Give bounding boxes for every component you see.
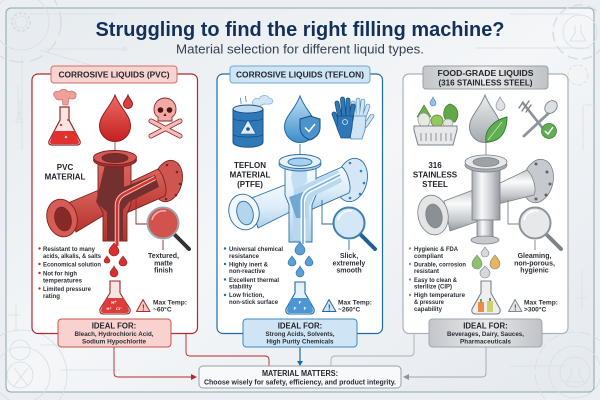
Teflon material label: MATERIAL xyxy=(230,170,270,180)
callout: material matters: Choose wisely for safety, efficiency, and product integrity. xyxy=(204,380,396,386)
Teflon property list: non-stick surface xyxy=(229,299,278,306)
icon: silver drop with leaf xyxy=(470,95,507,142)
Teflon flask xyxy=(286,282,314,314)
PVC property list: rating xyxy=(43,293,60,300)
PVC material label: PVC xyxy=(57,163,73,172)
PVC property list: Resistant to many xyxy=(43,246,95,253)
Teflon flask: F xyxy=(304,306,307,311)
PVC ideal-for box xyxy=(58,319,171,347)
Teflon property list: Highly inert & xyxy=(229,262,268,268)
PVC header tab: CORROSIVE LIQUIDS (PVC) xyxy=(58,71,170,80)
steel property list: & pressure xyxy=(414,299,444,306)
Teflon ideal-for box: IDEAL FOR: xyxy=(278,322,322,330)
icon: smoking flask xyxy=(49,89,80,145)
icon: skull and crossbones xyxy=(151,98,180,136)
Teflon property list: resistance xyxy=(229,253,259,260)
panel: Teflon xyxy=(217,66,382,347)
Teflon property list: Low friction, xyxy=(229,292,264,299)
Teflon temperature warning xyxy=(322,300,372,314)
Teflon cutaway pipe xyxy=(225,144,372,244)
connector: PVC ideal-for to material matters xyxy=(114,347,197,380)
PVC temperature warning: ~60°C xyxy=(153,306,172,314)
Teflon temperature warning: Max Temp: xyxy=(338,300,372,306)
steel property list: compliant xyxy=(414,253,444,260)
PVC property list xyxy=(38,246,101,300)
steel property list: capability xyxy=(414,306,442,313)
PVC acid flask: Cl⁻ xyxy=(116,306,122,311)
PVC material label xyxy=(45,163,85,182)
steel property list: Durable, corrosion xyxy=(414,262,466,268)
Teflon property list: non-reactive xyxy=(229,268,265,275)
steel property list: High temperature xyxy=(414,292,465,299)
steel material label: STEEL xyxy=(422,180,448,189)
Teflon temperature warning: ~260°C xyxy=(338,306,360,314)
PVC temperature warning: ! xyxy=(142,304,145,312)
Teflon ideal-for box: High Purity Chemicals xyxy=(266,338,334,346)
steel finish caption: Gleaming, xyxy=(518,253,551,260)
PVC magnifier xyxy=(136,198,189,250)
PVC falling drops xyxy=(104,243,127,277)
PVC ideal-for box: Bleach, Hydrochloric Acid, xyxy=(74,331,154,338)
panel: 316 stainless steel xyxy=(403,66,568,347)
PVC finish caption xyxy=(148,253,179,274)
steel flask with food bottles xyxy=(472,281,500,314)
icon: fork, spoon and check xyxy=(519,98,560,138)
PVC finish caption: matte xyxy=(154,260,173,268)
PVC cutaway pipe xyxy=(43,142,187,246)
icon: red droplets xyxy=(100,95,132,142)
Teflon finish caption: smooth xyxy=(336,268,362,274)
Teflon material label: TEFLON xyxy=(234,161,266,170)
title: Struggling to find the right filling machine? xyxy=(96,18,504,41)
PVC temperature warning: Max Temp: xyxy=(153,300,187,306)
PVC ideal-for box: IDEAL FOR: xyxy=(92,322,136,330)
steel header tab: (316 STAINLESS STEEL) xyxy=(438,78,533,88)
steel property list: resistant xyxy=(414,268,440,275)
Teflon property list xyxy=(224,246,283,306)
icon: protective gloves xyxy=(334,99,372,139)
panel: PVC xyxy=(32,66,198,347)
Teflon property list: stability xyxy=(229,284,252,290)
steel falling drops xyxy=(472,247,500,278)
Teflon material label xyxy=(230,161,270,189)
steel property list xyxy=(409,246,466,313)
PVC finish caption: Textured, xyxy=(148,253,179,260)
stainless steel pipe xyxy=(414,142,558,244)
PVC header tab xyxy=(51,66,177,83)
steel ideal-for box: Pharmaceuticals xyxy=(460,338,511,346)
Teflon finish caption: Slick, xyxy=(340,253,358,260)
PVC finish caption: finish xyxy=(154,268,173,274)
PVC material label: MATERIAL xyxy=(45,172,85,182)
PVC property list: Economical solution xyxy=(43,262,101,268)
subtitle: Material selection for different liquid types. xyxy=(176,42,424,56)
steel header tab xyxy=(423,66,548,89)
PVC acid flask xyxy=(100,281,130,314)
Teflon flask: F xyxy=(299,300,302,305)
steel temperature warning: Max Temp: xyxy=(524,300,558,306)
icon: droplet with shield xyxy=(284,96,320,142)
steel temperature warning: >300°C xyxy=(524,306,546,314)
steel magnifier xyxy=(508,200,561,250)
steel ideal-for box: IDEAL FOR: xyxy=(463,322,508,330)
PVC property list: Limited pressure xyxy=(43,286,91,293)
Teflon ideal-for box: Strong Acids, Solvents, xyxy=(266,331,335,338)
Teflon magnifier xyxy=(322,200,375,250)
steel temperature warning: ! xyxy=(514,304,517,312)
steel temperature warning xyxy=(508,300,558,314)
steel material label xyxy=(413,161,458,189)
PVC property list: Not for high xyxy=(43,270,77,278)
steel header tab: FOOD-GRADE LIQUIDS xyxy=(438,69,534,78)
Teflon header tab xyxy=(230,66,370,83)
PVC temperature warning xyxy=(136,300,187,314)
Teflon property list: Excellent thermal xyxy=(229,277,279,284)
Teflon ideal-for box xyxy=(243,319,357,347)
Teflon material label: (PTFE) xyxy=(237,180,263,189)
PVC ideal-for box: Sodium Hypochlorite xyxy=(82,338,146,346)
connector: PVC panel to material matters xyxy=(186,334,269,366)
steel material label: 316 xyxy=(428,161,442,170)
callout: material matters xyxy=(199,366,401,388)
icon: hazard barrel xyxy=(233,96,273,147)
Teflon finish caption xyxy=(333,253,365,274)
steel property list: Easy to clean & xyxy=(414,277,457,284)
Teflon flask: F xyxy=(294,306,297,311)
PVC property list: temperatures xyxy=(43,278,82,284)
PVC acid flask: H⁺ xyxy=(111,300,117,305)
connector: steel panel to material matters xyxy=(331,334,414,366)
Teflon property list: Universal chemical xyxy=(229,246,283,253)
connector: Teflon ideal-for to material matters xyxy=(297,347,303,366)
steel finish caption: non-porous, xyxy=(514,260,555,268)
Teflon header tab: CORROSIVE LIQUIDS (TEFLON) xyxy=(236,71,364,80)
steel ideal-for box: Beverages, Dairy, Sauces, xyxy=(447,331,524,338)
Teflon temperature warning: ! xyxy=(328,304,331,312)
callout: material matters: MATERIAL MATTERS: xyxy=(262,369,338,378)
PVC acid flask: H⁺ xyxy=(106,306,112,311)
steel ideal-for box xyxy=(429,319,542,347)
steel material label: STAINLESS xyxy=(413,170,458,180)
connector: steel ideal-for to material matters xyxy=(403,347,486,380)
steel property list: Hygienic & FDA xyxy=(414,246,458,253)
Teflon finish caption: extremely xyxy=(333,260,365,268)
steel finish caption: hygienic xyxy=(520,268,549,274)
steel property list: sterilize (CIP) xyxy=(414,284,452,290)
Teflon falling drops xyxy=(288,242,313,277)
icon: vegetable basket xyxy=(414,97,458,145)
PVC property list: acids, alkalis, & salts xyxy=(43,253,101,260)
steel finish caption xyxy=(514,253,555,274)
